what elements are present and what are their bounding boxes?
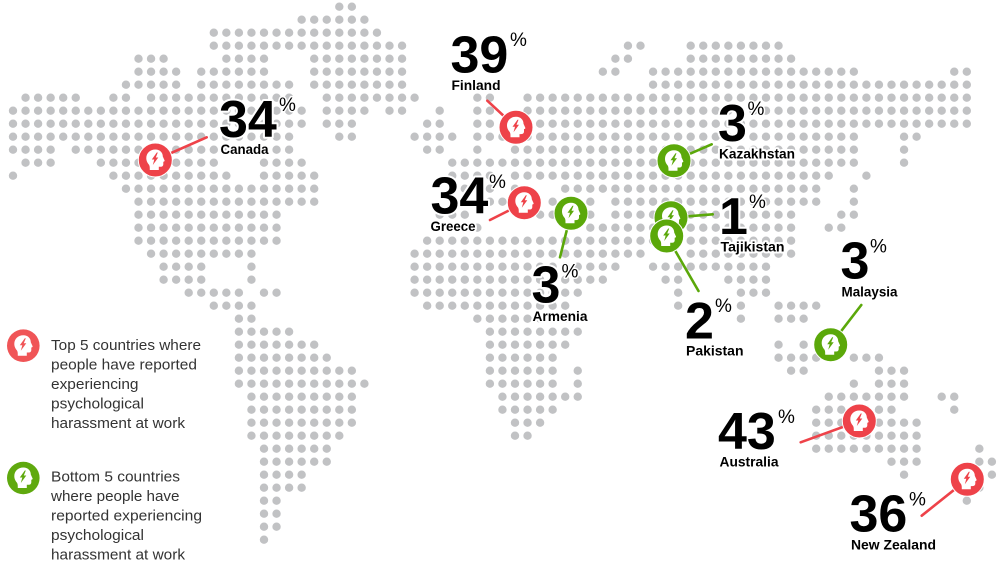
value: Armenia: 3 [532, 257, 560, 315]
label: Kazakhstan: Kazakhstan [719, 145, 795, 161]
percent sign: New Zealand: % [909, 490, 926, 510]
icon: green pin Pakistan [650, 219, 684, 253]
icon: green pin Tajikistan [654, 201, 688, 235]
value: Australia: 43 [718, 403, 776, 461]
legend text: bottom 5: reported experiencing [51, 508, 202, 525]
icon: legend green pin [7, 462, 40, 494]
callout: Malaysia [814, 232, 898, 362]
value: Malaysia: 3 [840, 232, 869, 290]
icon: green pin Armenia [554, 196, 588, 230]
icon: red pin Australia [842, 404, 876, 438]
legend text: top 5: Top 5 countries where [51, 337, 201, 354]
icon: green pin Malaysia [814, 328, 848, 362]
callout: Kazakhstan [657, 95, 795, 178]
percent sign: Kazakhstan: % [748, 99, 764, 120]
icon: red pin New Zealand [950, 462, 984, 496]
callout: Pakistan [650, 219, 744, 359]
value: Kazakhstan: 3 [718, 95, 747, 153]
icon: legend red pin [7, 329, 40, 362]
callout: Canada [138, 91, 296, 177]
legend text: bottom 5: psychological [51, 527, 144, 544]
value: Pakistan: 2 [685, 292, 714, 350]
label: Canada: Canada [220, 141, 269, 157]
percent sign: Canada: % [279, 95, 296, 116]
value: Tajikistan: 1 [719, 188, 748, 246]
percent sign: Greece: % [489, 172, 506, 193]
value: Greece: 34 [430, 167, 488, 225]
label: Pakistan: Pakistan [686, 343, 744, 359]
percent sign: Finland: % [510, 30, 527, 51]
legend text: top 5: psychological [51, 396, 144, 412]
callout: Finland [450, 27, 533, 144]
percent sign: Australia: % [778, 407, 795, 428]
percent sign: Malaysia: % [870, 236, 887, 258]
callout: New Zealand [850, 462, 984, 552]
callout: Armenia [532, 196, 588, 324]
label: Malaysia: Malaysia [842, 284, 898, 300]
label: Armenia: Armenia [532, 308, 588, 324]
percent sign: Pakistan: % [715, 296, 732, 317]
callout: Greece [430, 167, 541, 234]
legend text: bottom 5: where people have [50, 488, 180, 505]
percent sign: Tajikistan: % [749, 192, 766, 213]
label: Greece: Greece [430, 218, 476, 234]
value: New Zealand: 36 [850, 486, 907, 544]
icon: red pin Greece [507, 186, 541, 220]
percent sign: Armenia: % [562, 262, 578, 282]
legend: top 5 countries [7, 329, 201, 432]
label: Tajikistan: Tajikistan [720, 239, 784, 255]
callout: Tajikistan [654, 188, 784, 255]
legend text: top 5: experiencing [51, 376, 138, 393]
legend text: top 5: harassment at work [51, 415, 186, 432]
legend text: top 5: people have reported [51, 356, 197, 374]
value: Canada: 34 [219, 91, 277, 149]
value: Finland: 39 [450, 27, 508, 85]
label: Australia: Australia [720, 454, 779, 470]
legend text: bottom 5: Bottom 5 countries [51, 469, 180, 486]
legend: bottom 5 countries [7, 462, 202, 564]
label: Finland: Finland [452, 77, 500, 93]
legend text: top 5 [51, 337, 201, 432]
label: New Zealand: New Zealand [851, 536, 936, 552]
icon: green pin Kazakhstan [657, 144, 691, 178]
legend text: bottom 5: harassment at work [51, 546, 186, 564]
callout: Australia [718, 403, 876, 470]
icon: red pin Finland [499, 110, 533, 144]
legend text: bottom 5 [50, 469, 202, 564]
icon: red pin Canada [138, 143, 172, 177]
